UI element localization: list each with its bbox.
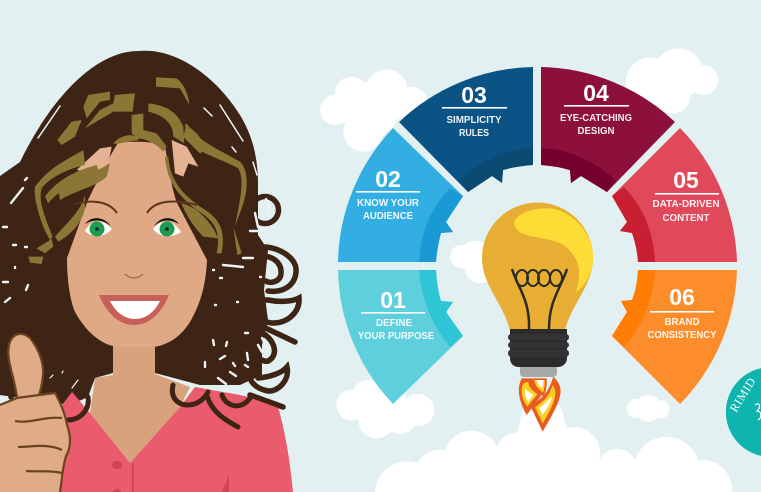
segment 02: know your audience: AUDIENCE [363, 210, 413, 222]
cloud: top right [626, 48, 718, 113]
segment 03: simplicity rules [399, 67, 533, 192]
shirt placket and buttons [112, 461, 229, 492]
segment 02: know your audience: KNOW YOUR [357, 197, 419, 209]
flames [519, 377, 561, 432]
segment 01: define your purpose: DEFINE [376, 317, 412, 329]
segment 04: eye-catching design [541, 67, 675, 192]
screw base [508, 329, 569, 367]
segment 05: data-driven content: 05 [673, 167, 699, 193]
segment 06: brand consistency: 06 [669, 284, 695, 310]
hair curls right and left [3, 178, 299, 407]
segment 02: know your audience [338, 128, 463, 262]
segment 04: eye-catching design: DESIGN [578, 125, 614, 137]
segment 05: data-driven content [612, 128, 737, 262]
mouth [99, 295, 169, 325]
segment 03: simplicity rules: 03 [461, 82, 487, 108]
hand thumbs up [0, 334, 70, 492]
cloud: lower left [336, 380, 434, 438]
hair flecks and gaps [3, 105, 269, 388]
cloud: bottom with rocket plume [375, 405, 732, 492]
face [67, 142, 207, 347]
cloud: behind bulb [450, 241, 495, 283]
eyebrows [74, 201, 197, 213]
icon: light bulb rocket [482, 202, 593, 432]
badge: teal round stamp: RIMID [727, 375, 759, 415]
hair strands over shirt [68, 385, 283, 427]
teeth [110, 301, 160, 319]
segment 04: eye-catching design: 04 [583, 80, 609, 106]
pink shirt [60, 387, 293, 492]
segment 06: brand consistency [612, 270, 737, 404]
bulb highlight [514, 208, 593, 292]
character: woman giving thumbs up [0, 51, 299, 492]
segment 03: simplicity rules: RULES [459, 127, 489, 139]
segment 03: simplicity rules: SIMPLICITY [446, 114, 502, 126]
hair back mass [0, 51, 268, 405]
segment 06: brand consistency: BRAND [664, 316, 700, 328]
semicircular infographic wheel [338, 67, 737, 404]
cloud: top left [320, 69, 428, 152]
base collar [520, 367, 557, 377]
segment 04: eye-catching design: EYE-CATCHING [560, 112, 632, 124]
hair highlights [28, 77, 247, 264]
segment 01: define your purpose [338, 270, 463, 404]
neck and chest [90, 340, 190, 463]
bulb glass [482, 202, 593, 330]
right eye [153, 218, 181, 236]
badge: teal round stamp [726, 368, 761, 456]
segment 01: define your purpose: YOUR PURPOSE [358, 330, 434, 342]
segment 02: know your audience: 02 [375, 166, 401, 192]
segment 05: data-driven content: DATA-DRIVEN [652, 198, 720, 210]
cloud: lower right small [627, 395, 670, 422]
filament [512, 269, 567, 329]
left eye [85, 218, 112, 236]
segment 01: define your purpose: 01 [380, 287, 406, 313]
segment 06: brand consistency: CONSISTENCY [648, 329, 716, 341]
nose [125, 274, 143, 278]
segment 05: data-driven content: CONTENT [662, 212, 710, 224]
